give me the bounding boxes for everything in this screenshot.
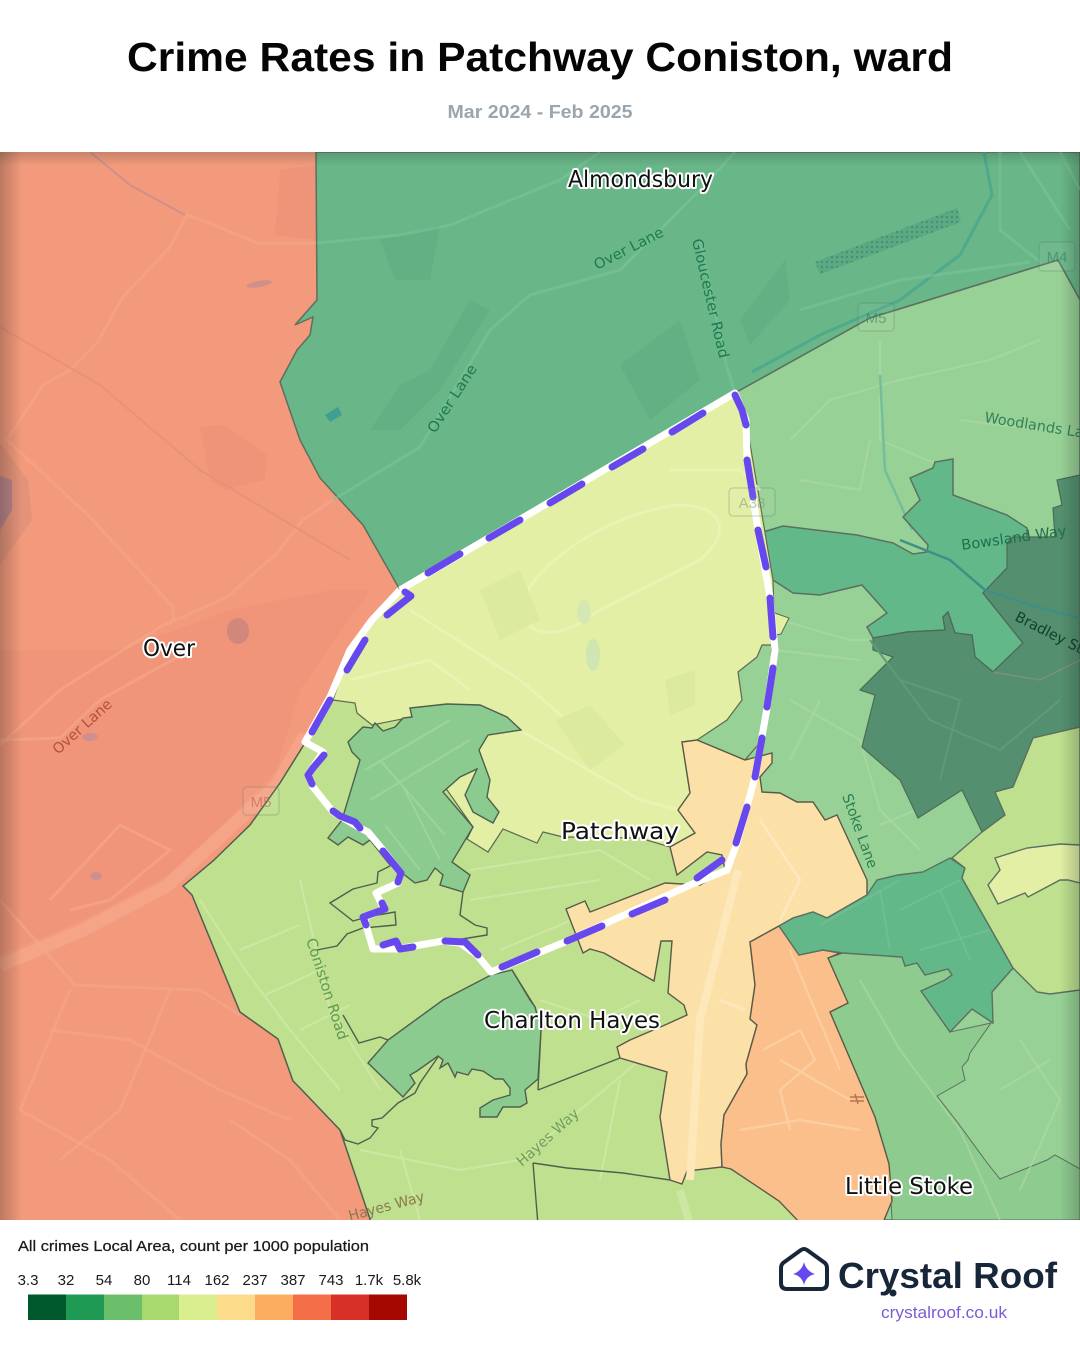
area: Patchway south (peach) xyxy=(566,740,867,1184)
legend scale values: 1.7k xyxy=(355,1272,384,1289)
place labels: Little Stoke xyxy=(845,1174,973,1200)
website url: crystalroof.co.uk xyxy=(881,1304,1008,1322)
legend scale values: 32 xyxy=(58,1272,74,1289)
legend scale values: 80 xyxy=(134,1272,150,1289)
area: Coniston and Charlton Hayes (pale green) xyxy=(183,700,802,1225)
legend xyxy=(18,1238,422,1320)
road shield labels: M4 xyxy=(1047,249,1067,266)
choropleth map xyxy=(0,152,1080,1225)
street labels xyxy=(50,225,1080,1225)
area: Little Stoke west (orange) xyxy=(721,926,892,1225)
legend scale values: 114 xyxy=(167,1272,191,1289)
road shield labels: M5 xyxy=(866,310,886,327)
legend title: All crimes Local Area, count per 1000 population xyxy=(18,1238,369,1255)
street labels: Over Lane xyxy=(50,697,116,758)
dark area streets and water xyxy=(870,540,1080,780)
area: ward central (pale yellow-green) xyxy=(333,393,775,852)
green area fields, roads and water xyxy=(317,152,1080,500)
boundary lines between Coniston areas xyxy=(317,866,670,1225)
subtitle: date range: Mar 2024 - Feb 2025 xyxy=(448,101,632,122)
logo key tail on the y xyxy=(890,1290,896,1296)
area: Almondsbury (low crime, green) xyxy=(280,152,1080,590)
legend colour bar xyxy=(28,1294,407,1320)
area: far east pale yellow patch xyxy=(988,844,1080,904)
street labels: Over Lane xyxy=(425,362,481,436)
area: south-east teal green xyxy=(779,858,1013,1032)
place labels: Over xyxy=(143,636,196,662)
peach street network xyxy=(690,820,800,1180)
legend scale values: 237 xyxy=(242,1272,268,1289)
ward streets and fields xyxy=(350,470,760,810)
logo wordmark: Crystal Roof xyxy=(838,1255,1058,1296)
legend scale values: 54 xyxy=(96,1272,112,1289)
area: darkest green (lowest crime) xyxy=(860,475,1080,832)
place labels: Charlton Hayes xyxy=(484,1008,660,1034)
area: north-east teal green xyxy=(763,459,1027,672)
area: sliver of light green inside ward xyxy=(697,645,772,760)
east street network xyxy=(775,340,1060,1220)
street labels: Stoke Lane xyxy=(838,792,880,871)
orange street network xyxy=(740,950,860,1130)
road shield labels: M5 xyxy=(251,794,271,811)
legend scale values: 162 xyxy=(204,1272,230,1289)
place labels xyxy=(143,167,973,1200)
map edge shading xyxy=(0,152,1080,1220)
area: medium green north of Coniston xyxy=(328,704,521,892)
icon: house with star xyxy=(781,1249,827,1289)
area: Charlton Hayes medium green xyxy=(368,970,541,1117)
street labels: Bowsland Way xyxy=(960,523,1068,554)
ward boundary: purple dashes xyxy=(308,395,773,967)
road shield labels xyxy=(251,249,1067,811)
street labels: Over Lane xyxy=(592,225,667,274)
legend scale values: 3.3 xyxy=(18,1272,38,1289)
legend scale values xyxy=(18,1272,422,1289)
legend scale values: 387 xyxy=(280,1272,306,1289)
street labels: Hayes Way xyxy=(347,1189,427,1225)
area: far east pale green xyxy=(952,727,1080,994)
area: east neighbourhoods (light green) xyxy=(730,260,1080,1220)
road shields xyxy=(243,242,1075,815)
ward boundary: white outline xyxy=(305,393,775,972)
street labels: Hayes Way xyxy=(514,1106,583,1170)
road shield labels: A38 xyxy=(739,495,765,512)
teal street network xyxy=(820,880,990,960)
street labels: Coniston Road xyxy=(302,936,350,1042)
street labels: Gloucester Road xyxy=(688,237,731,360)
place labels: Patchway xyxy=(561,819,679,845)
area: Over (high crime, red) xyxy=(0,152,398,1220)
legend scale values: 743 xyxy=(318,1272,344,1289)
logo: Crystal Roof xyxy=(781,1249,1058,1322)
area: central south-east (medium green) xyxy=(828,953,1080,1220)
Coniston street network xyxy=(200,850,690,1225)
hatched field xyxy=(815,208,961,274)
medium green streets xyxy=(365,720,470,870)
place labels: Almondsbury xyxy=(568,167,713,193)
small yellow patches on the east ward edge xyxy=(775,612,790,636)
icon: railway station xyxy=(850,1094,864,1104)
red area darker fields and roads xyxy=(0,152,370,1220)
legend scale values: 5.8k xyxy=(393,1272,422,1289)
title: Crime Rates in Patchway Coniston, ward xyxy=(127,34,953,80)
